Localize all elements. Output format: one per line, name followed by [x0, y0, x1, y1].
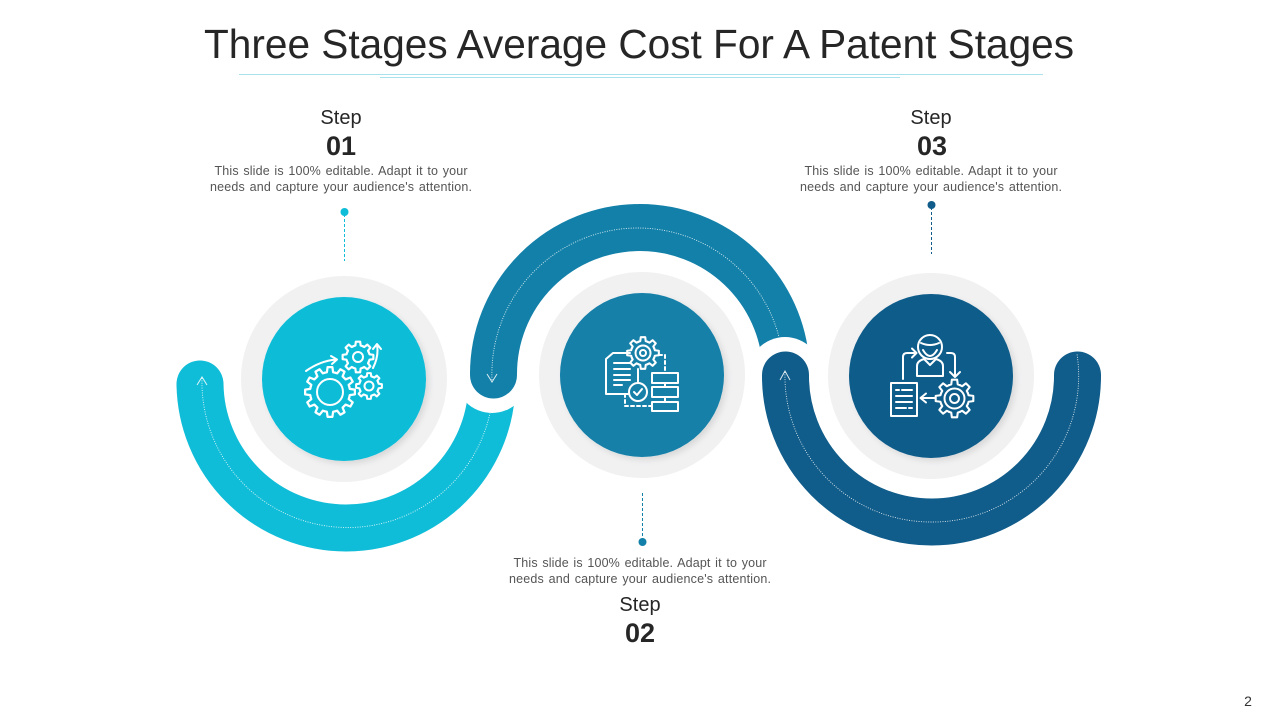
icon: gears with arrows [305, 342, 382, 417]
text block: step 1: This slide is 100% editable. Adapt it to your [214, 164, 468, 178]
text block: step 2: needs and capture your audience's attention. [509, 572, 771, 586]
text block: step 1: needs and capture your audience's attention. [210, 180, 472, 194]
text block: step 3: 03 [917, 131, 947, 161]
circle: step 2 [539, 272, 745, 478]
arc band: step 2 [455, 228, 786, 413]
text block: step 3 [800, 107, 1062, 194]
circle: step 3 [828, 273, 1034, 479]
icon: document, gear and flow [606, 337, 678, 411]
page number: 2 [1244, 693, 1252, 709]
arc band: step 1 [176, 360, 491, 528]
connector: step 1 [340, 208, 348, 261]
text block: step 2 [509, 556, 771, 648]
connector: step 3 [928, 201, 936, 254]
connector: step 2 [638, 493, 646, 546]
title: Three Stages Average Cost For A Patent Stages [204, 21, 1074, 67]
text block: step 2: 02 [625, 618, 655, 648]
text block: step 2: Step [619, 594, 661, 616]
text block: step 2: This slide is 100% editable. Adapt it to your [514, 556, 766, 570]
text block: step 1: 01 [326, 131, 356, 161]
arc band: step 3 [748, 337, 1079, 522]
text block: step 1 [210, 107, 472, 194]
circle: step 1 [241, 276, 447, 482]
icon: person, gear and document cycle [891, 335, 973, 417]
text block: step 1: Step [320, 107, 362, 129]
text block: step 3: This slide is 100% editable. Adapt it to your [804, 164, 1058, 178]
text block: step 3: needs and capture your audience's attention. [800, 180, 1062, 194]
text block: step 3: Step [910, 107, 952, 129]
title underline [239, 74, 1043, 78]
